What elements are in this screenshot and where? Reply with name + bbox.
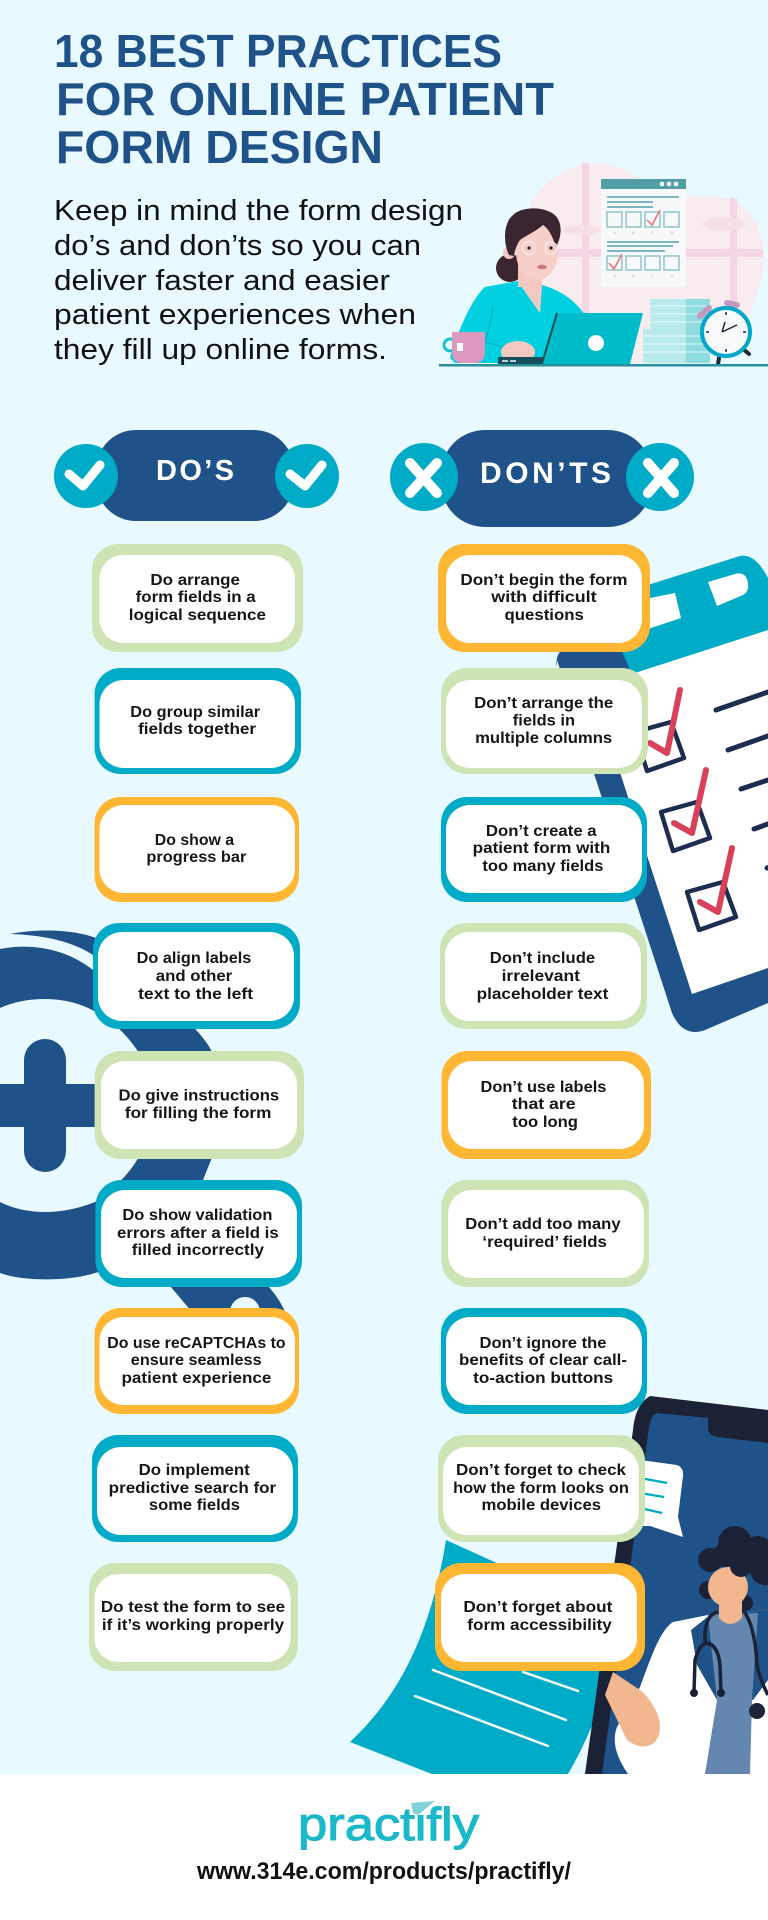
card: don't add required: Don’t add too many <box>465 1216 621 1233</box>
title <box>54 25 554 173</box>
footer panel <box>0 1774 768 1920</box>
card: do implement <box>92 1435 298 1542</box>
card: don't begin: with difficult <box>490 589 597 606</box>
card: don't use labels: too long <box>512 1114 578 1131</box>
intro text: Keep in mind the form design <box>54 195 463 227</box>
card: do give instructions: for filling the form <box>125 1105 271 1122</box>
illustration: doctor <box>605 1526 768 1774</box>
card: don't create <box>441 797 647 902</box>
heading: do's: DO’S <box>156 455 234 487</box>
card: don't use labels: Don’t use labels <box>480 1079 606 1096</box>
card: do use recaptcha: patient experience <box>122 1370 272 1387</box>
card: do show progress: Do show a <box>155 832 234 849</box>
card: do show validation <box>96 1180 302 1287</box>
card: don't ignore: benefits of clear call- <box>459 1352 627 1369</box>
card: do test: if it’s working properly <box>102 1617 284 1634</box>
card: do show progress <box>95 797 299 902</box>
card: don't arrange: fields in <box>513 713 575 730</box>
card: don't add required <box>442 1180 649 1287</box>
card: don't arrange: Don’t arrange the <box>474 695 613 712</box>
card: don't create: patient form with <box>473 840 610 857</box>
card: don't create: too many fields <box>482 858 603 875</box>
card: don't include: Don’t include <box>490 950 595 967</box>
card: don't forget accessibility: Don’t forget about <box>463 1599 613 1616</box>
heading: don'ts: DON’TS <box>480 457 611 490</box>
icon: clipboard with checklist <box>556 556 768 1032</box>
card: do group: fields together <box>138 721 256 738</box>
heading: do's <box>54 430 339 521</box>
icon: stack of papers <box>643 299 710 363</box>
icon: laptop <box>498 313 643 364</box>
illustration: phone <box>585 1396 768 1774</box>
card: don't forget accessibility <box>435 1563 645 1671</box>
card: do group: Do group similar <box>130 704 260 721</box>
card: do arrange: Do arrange <box>150 572 240 589</box>
card: don't include: irrelevant <box>502 968 581 985</box>
heading: don'ts <box>390 430 694 527</box>
card: don't include: placeholder text <box>477 986 609 1003</box>
card: do arrange <box>92 544 303 652</box>
card: do give instructions <box>95 1051 304 1159</box>
icon: form sheet: D <box>670 230 673 235</box>
title: FOR ONLINE PATIENT <box>56 73 554 125</box>
card: don't forget mobile: mobile devices <box>482 1497 601 1514</box>
card: don't begin <box>438 544 650 652</box>
card: don't include <box>440 923 647 1029</box>
icon: mug <box>444 332 485 363</box>
card: do arrange: form fields in a <box>136 589 256 606</box>
figure: woman <box>450 208 585 363</box>
icon: form sheet: D <box>670 273 673 278</box>
logo: practifly: practifly <box>298 1798 479 1850</box>
card: don't forget mobile: Don’t forget to check <box>456 1462 626 1479</box>
card: do test <box>89 1563 298 1671</box>
card: don't use labels: that are <box>512 1096 576 1113</box>
card: don't ignore: Don’t ignore the <box>480 1335 607 1352</box>
intro text <box>54 195 463 366</box>
card: do align <box>93 923 300 1029</box>
card: do show validation: errors after a field is <box>117 1225 279 1242</box>
card: do show validation: filled incorrectly <box>132 1242 264 1259</box>
card: don't create: Don’t create a <box>486 823 597 840</box>
card: do arrange: logical sequence <box>129 607 266 624</box>
card: do align: text to the left <box>138 986 254 1003</box>
intro text: patient experiences when <box>54 299 416 331</box>
illustration: curved document <box>350 1540 612 1774</box>
icon: form sheet: C <box>651 273 654 278</box>
icon: form sheet: A <box>613 273 616 278</box>
intro text: deliver faster and easier <box>54 265 390 297</box>
icon: medical cross ring <box>0 931 285 1312</box>
website url: www.314e.com/products/practifly/ <box>196 1858 571 1885</box>
icon: form sheet: C <box>651 230 654 235</box>
card: don't ignore: to-action buttons <box>473 1370 613 1387</box>
icon: alarm clock <box>700 303 750 364</box>
card: don't begin: Don’t begin the form <box>460 572 627 589</box>
hero illustration: woman at laptop with form <box>439 163 768 366</box>
title: 18 BEST PRACTICES <box>54 25 502 77</box>
icon: form sheet: B <box>632 230 635 235</box>
intro text: they fill up online forms. <box>54 334 387 366</box>
card: do use recaptcha: Do use reCAPTCHAs to <box>107 1335 286 1352</box>
card: do show progress: progress bar <box>146 849 246 866</box>
card: do implement: predictive search for <box>109 1480 276 1497</box>
card: don't forget accessibility: form accessibility <box>467 1617 612 1634</box>
card: do align: and other <box>156 968 232 985</box>
card: do align: Do align labels <box>137 950 251 967</box>
card: do use recaptcha <box>95 1308 299 1414</box>
card: do show validation: Do show validation <box>122 1207 272 1224</box>
title: FORM DESIGN <box>56 121 383 173</box>
card: do give instructions: Do give instructions <box>118 1088 279 1105</box>
card: don't ignore <box>441 1308 647 1414</box>
card: do implement: Do implement <box>139 1462 250 1479</box>
card: don't forget mobile <box>438 1435 645 1542</box>
icon: form sheet: A <box>613 230 616 235</box>
card: don't arrange <box>441 668 648 774</box>
card: don't add required: ‘required’ fields <box>482 1234 607 1251</box>
card: don't begin: questions <box>504 607 584 624</box>
card: do test: Do test the form to see <box>101 1599 285 1616</box>
icon: form sheet <box>601 179 686 287</box>
card: don't forget mobile: how the form looks on <box>453 1480 629 1497</box>
card: do group <box>95 668 301 774</box>
card: don't arrange: multiple columns <box>475 730 612 747</box>
intro text: do’s and don’ts so you can <box>54 230 421 262</box>
card: do implement: some fields <box>149 1497 240 1514</box>
icon: form sheet: B <box>632 273 635 278</box>
card: don't use labels <box>442 1051 651 1159</box>
card: do use recaptcha: ensure seamless <box>131 1352 262 1369</box>
